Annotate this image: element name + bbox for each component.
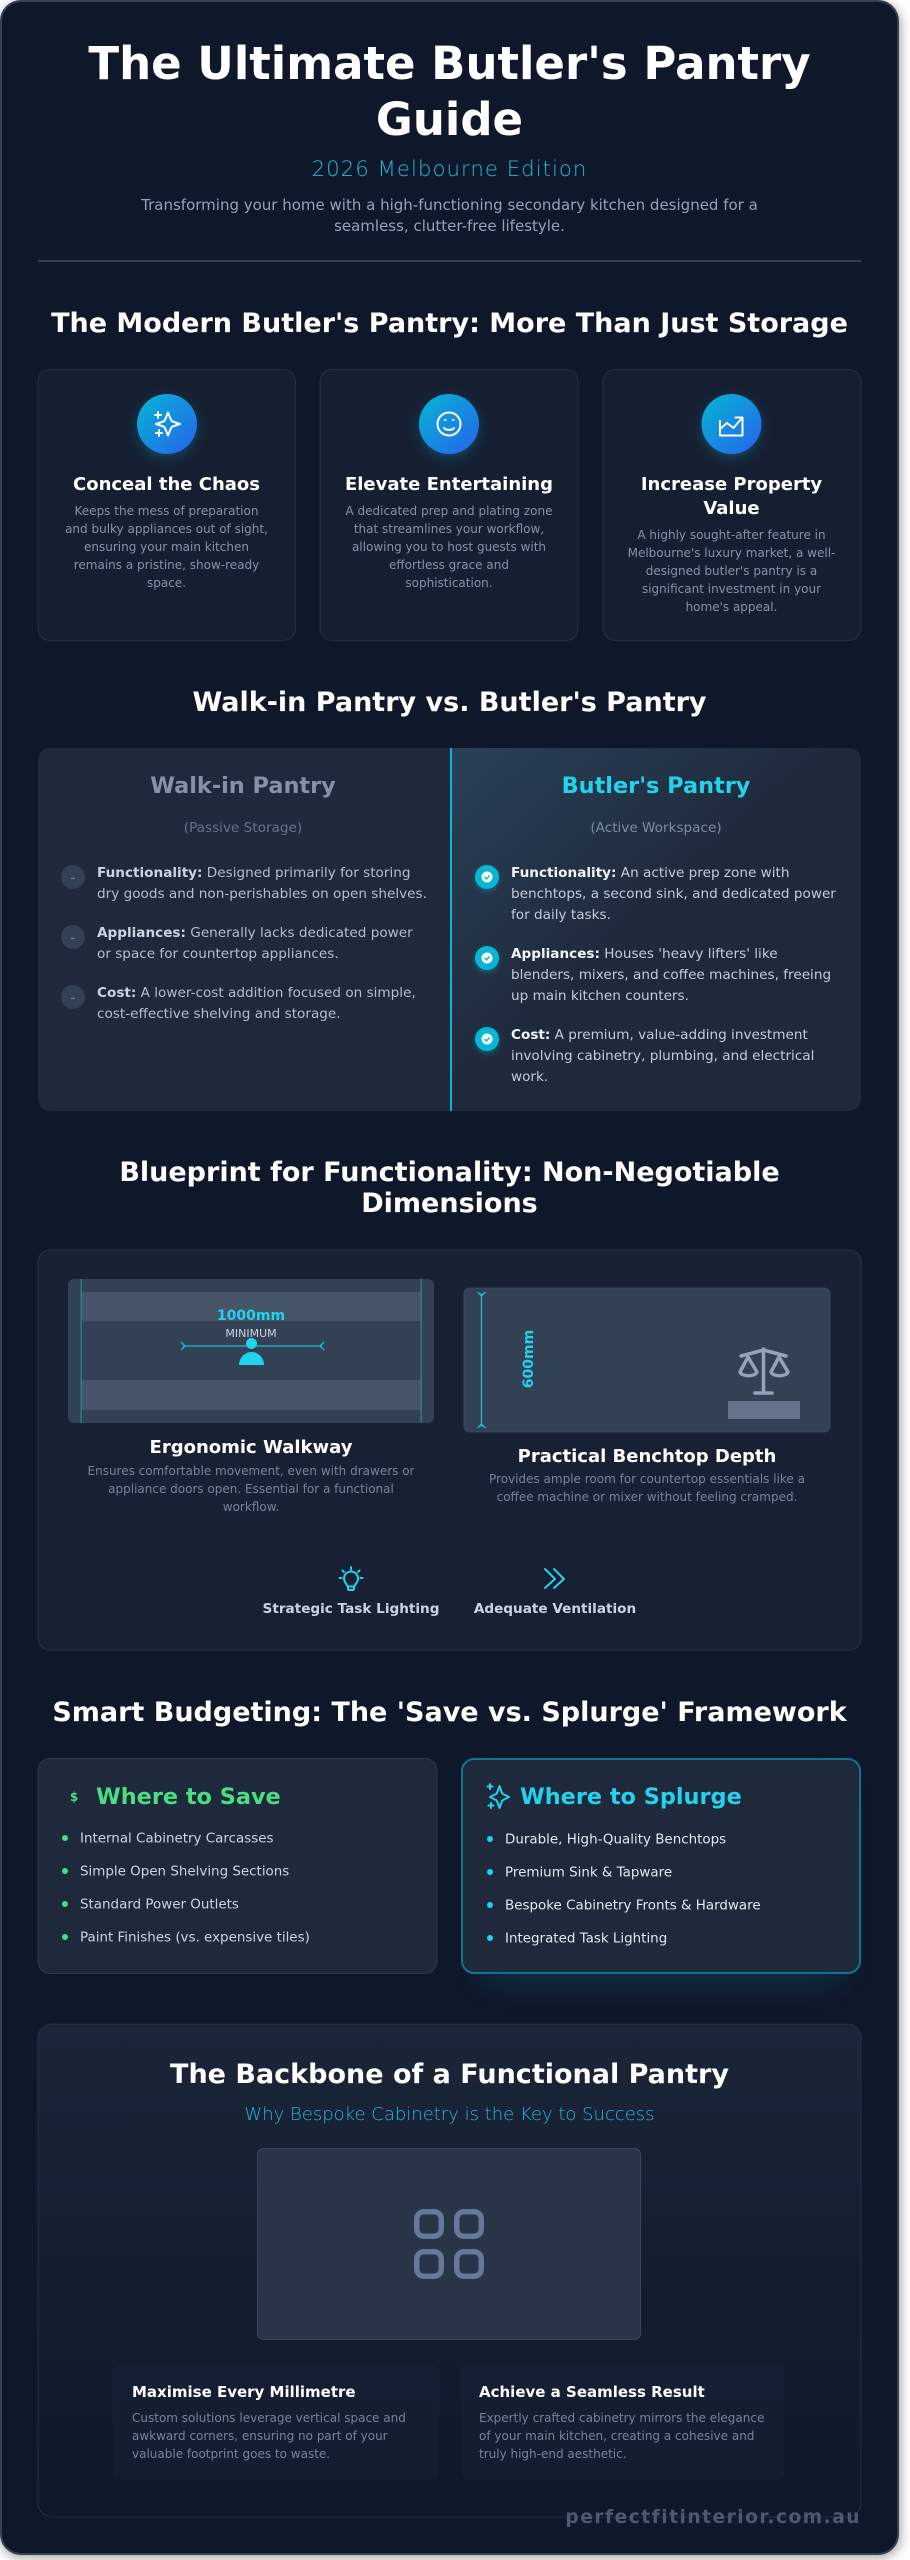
item: cost: Cost: A lower-cost addition focused on simple,	[97, 985, 416, 1001]
card title: Elevate Entertaining	[345, 474, 553, 495]
item: appliances: –	[70, 933, 76, 944]
feature: ventilation	[474, 1569, 636, 1617]
item: cost: –	[70, 993, 76, 1004]
icon: chart	[702, 394, 762, 458]
text: benchtop depth: Practical Benchtop Depth	[518, 1446, 776, 1467]
icon: sparkles	[488, 1784, 509, 1808]
heading: blueprint: Blueprint for Functionality: Non-Negotiable	[119, 1157, 780, 1188]
list: Standard Power Outlets	[80, 1898, 239, 1912]
panel: conceal the chaos	[38, 370, 296, 640]
item: cost	[61, 985, 416, 1022]
measurement label: 1000mm	[217, 1308, 285, 1324]
card title: Increase Property	[641, 474, 822, 495]
list: Bespoke Cabinetry Fronts & Hardware	[505, 1898, 761, 1914]
measurement label: 600mm	[521, 1330, 537, 1388]
panel title: Where to Splurge	[520, 1784, 742, 1810]
card: seamless: truly high-end aesthetic.	[479, 2447, 627, 2461]
text: benchtop depth	[489, 1446, 805, 1504]
measurement arrow	[181, 1342, 324, 1350]
card text: Keeps the mess of preparation	[75, 504, 258, 518]
text: ergonomic walkway	[88, 1437, 415, 1514]
item: cost: Cost: A premium, value-adding investment	[511, 1027, 808, 1043]
item: appliances: blenders, mixers, and coffee machines, freeing	[511, 967, 831, 983]
card: seamless: Expertly crafted cabinetry mirrors the elegance	[479, 2411, 764, 2425]
panel: increase property value	[603, 370, 861, 640]
item: appliances: Appliances: Houses 'heavy lifters' like	[511, 946, 778, 962]
icon: sparkles	[137, 394, 197, 458]
text: ergonomic walkway: Ensures comfortable movement, even with drawers or	[88, 1464, 414, 1478]
text: benchtop depth: coffee machine or mixer without feeling cramped.	[497, 1490, 797, 1504]
panel: walk-in pantry	[38, 748, 450, 1111]
item: cost: involving cabinetry, plumbing, and electrical	[511, 1048, 814, 1064]
text: ergonomic walkway: appliance doors open. Essential for a functional	[108, 1482, 394, 1496]
card text: A highly sought-after feature in	[637, 528, 826, 542]
item: cost	[475, 1027, 814, 1085]
card: maximise: Custom solutions leverage vertical space and	[132, 2411, 406, 2425]
item: appliances: up main kitchen counters.	[511, 988, 689, 1004]
card: seamless: Achieve a Seamless Result	[479, 2383, 705, 2401]
panel: where to save	[38, 1758, 437, 1974]
item: functionality: dry goods and non-perishables on open shelves.	[97, 886, 427, 902]
card text: A dedicated prep and plating zone	[346, 504, 552, 518]
panel: elevate entertaining	[320, 370, 578, 640]
title: The Ultimate Butler's Pantry	[88, 37, 811, 90]
text: benchtop depth: Provides ample room for countertop essentials like a	[489, 1472, 805, 1486]
card text: significant investment in your	[642, 582, 821, 596]
diagram: walkway	[68, 1279, 434, 1423]
card text: allowing you to host guests with	[352, 540, 546, 554]
column heading: Walk-in Pantry	[150, 773, 336, 799]
card: maximise	[114, 2365, 438, 2480]
panel: where to splurge	[462, 1759, 860, 1985]
item: functionality	[61, 865, 427, 902]
tagline: seamless, clutter-free lifestyle.	[334, 217, 565, 235]
card title: Conceal the Chaos	[73, 474, 260, 495]
item: appliances: Appliances: Generally lacks dedicated power	[97, 925, 413, 941]
item: appliances	[61, 925, 413, 962]
tagline: Transforming your home with a high-functioning secondary kitchen designed for a	[141, 196, 758, 214]
heading: comparison: Walk-in Pantry vs. Butler's Pantry	[192, 687, 707, 718]
text: ergonomic walkway: workflow.	[223, 1500, 279, 1514]
card text: and bulky appliances out of sight,	[65, 522, 268, 536]
card: maximise: valuable footprint goes to waste.	[132, 2447, 330, 2461]
card text: space.	[147, 576, 186, 590]
heading: blueprint: Dimensions	[361, 1188, 538, 1219]
watermark: perfectfitinterior.com.au	[565, 2507, 861, 2528]
heading: budgeting: Smart Budgeting: The 'Save vs. Splurge' Framework	[52, 1697, 848, 1728]
feature: task lighting: Strategic Task Lighting	[263, 1601, 439, 1617]
list	[487, 1832, 761, 1946]
item: functionality: for daily tasks.	[511, 907, 611, 923]
item: functionality: benchtops, a second sink, and dedicated power	[511, 886, 836, 902]
card text: Melbourne's luxury market, a well-	[628, 546, 835, 560]
item: cost: work.	[511, 1069, 548, 1085]
card: maximise: awkward corners, ensuring no part of your	[132, 2429, 388, 2443]
list: Simple Open Shelving Sections	[80, 1864, 289, 1880]
card text: effortless grace and	[389, 558, 509, 572]
list: Internal Cabinetry Carcasses	[80, 1832, 273, 1846]
subtitle: 2026 Melbourne Edition	[312, 157, 587, 182]
card text: that streamlines your workflow,	[354, 522, 544, 536]
item: functionality: Functionality: Designed primarily for storing	[97, 865, 410, 881]
diagram: benchtop	[464, 1288, 830, 1432]
image placeholder	[258, 2148, 640, 2340]
card title: Value	[703, 498, 760, 519]
list	[62, 1832, 310, 1946]
card text: ensuring your main kitchen	[84, 540, 249, 554]
item: functionality: Functionality: An active prep zone with	[511, 865, 790, 881]
icon: scales	[740, 1349, 788, 1393]
icon: grid	[417, 2212, 481, 2276]
panel: dimensions	[38, 1250, 861, 1650]
column subheading: (Passive Storage)	[184, 820, 302, 836]
feature: ventilation: Adequate Ventilation	[474, 1601, 636, 1617]
header	[88, 37, 811, 235]
item: cost: cost-effective shelving and storage.	[97, 1006, 341, 1022]
item: functionality: –	[70, 873, 76, 884]
card: maximise: Maximise Every Millimetre	[132, 2383, 356, 2401]
panel: backbone	[38, 2024, 861, 2517]
subheading: Why Bespoke Cabinetry is the Key to Success	[244, 2104, 655, 2125]
card text: home's appeal.	[686, 600, 777, 614]
column heading: Butler's Pantry	[562, 773, 751, 799]
heading: modern butler's pantry: The Modern Butler's Pantry: More Than Just Storage	[51, 308, 848, 339]
item: functionality	[475, 865, 836, 923]
card text: sophistication.	[405, 576, 493, 590]
card text: remains a pristine, show-ready	[74, 558, 259, 572]
item: appliances	[475, 946, 831, 1004]
list: Integrated Task Lighting	[505, 1932, 667, 1946]
icon: smile	[419, 394, 479, 458]
heading: The Backbone of a Functional Pantry	[170, 2059, 729, 2090]
list: Durable, High-Quality Benchtops	[505, 1832, 726, 1848]
panel title: Where to Save	[96, 1784, 281, 1810]
card: seamless: of your main kitchen, creating a cohesive and	[479, 2429, 754, 2443]
diagram: walkway: MINIMUM	[225, 1327, 277, 1340]
column subheading: (Active Workspace)	[590, 820, 722, 836]
list: Premium Sink & Tapware	[505, 1866, 672, 1880]
card text: designed butler's pantry is a	[646, 564, 817, 578]
text: ergonomic walkway: Ergonomic Walkway	[150, 1437, 353, 1458]
icon: dollar: $	[70, 1790, 78, 1804]
feature: task lighting	[263, 1567, 439, 1617]
card: seamless	[461, 2365, 784, 2480]
list: Paint Finishes (vs. expensive tiles)	[80, 1930, 310, 1946]
item: appliances: or space for countertop appliances.	[97, 946, 339, 962]
icon: person	[239, 1352, 264, 1365]
panel: butler's pantry	[450, 748, 861, 1111]
title: Guide	[376, 93, 523, 146]
